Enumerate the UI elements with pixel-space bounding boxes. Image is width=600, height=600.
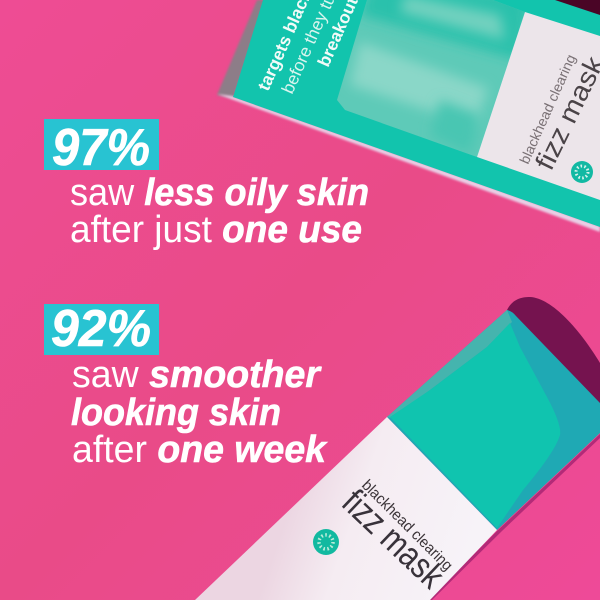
box white lower edge [217,94,600,232]
tube cap [387,310,600,530]
stat text 92%: after one week [72,429,328,471]
tube white body [195,417,497,600]
stat badge 97%: 97% [52,119,150,177]
stat block: 92% [44,300,328,471]
tube lower shadow [428,434,600,600]
icon: box cucumber badge [571,161,593,183]
stat text 97%: saw less oily skin [70,172,369,214]
box corner shadow [555,0,600,15]
stat text 92% [71,354,328,471]
stat badge 92%: 92% [51,300,151,358]
box side flap [217,0,266,98]
box window [330,0,530,160]
product tube [195,297,600,600]
tube shadow [507,297,600,405]
box white label [477,12,600,200]
box label: blackhead clearing: blackhead clearing [516,52,579,166]
stat text 97% [70,172,369,251]
stat text 92%: saw smoother [72,354,322,396]
product box [217,0,600,232]
stat block: 97% [44,119,369,251]
stat text 97%: after just one use [70,209,362,251]
icon: tube cucumber badge [313,529,339,555]
stat text 92%: looking skin [71,392,281,434]
tube label: blackhead clearing: blackhead clearing [358,477,456,574]
box teal front [233,0,600,227]
